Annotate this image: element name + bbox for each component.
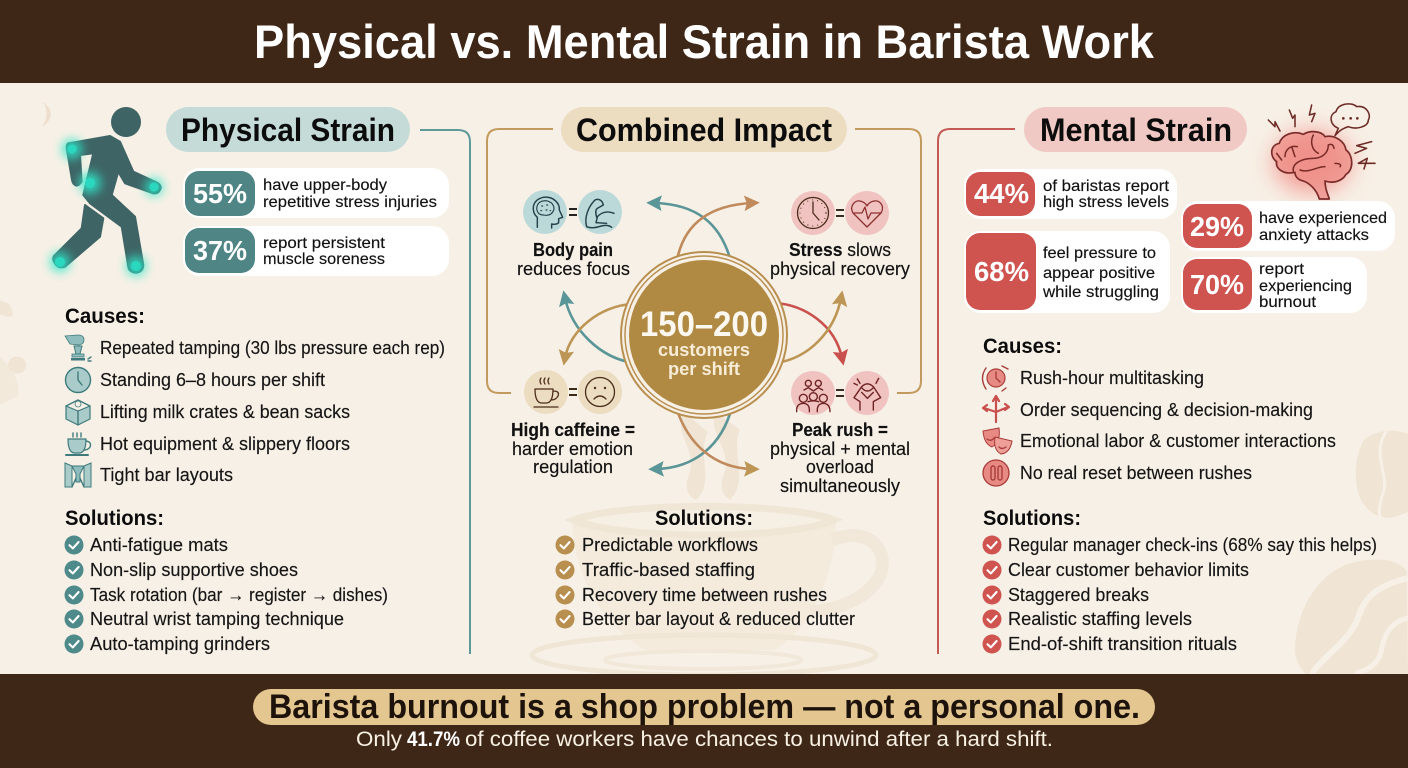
stat: 37%: [183, 226, 449, 276]
stat: 29%: 29%: [1190, 211, 1244, 242]
icon: theatre masks: [983, 428, 1012, 454]
solutions: physical: Solutions:: [65, 507, 164, 530]
icon: hot cup: [66, 433, 90, 455]
icon: clock: [791, 191, 835, 235]
solutions: mental: Realistic staffing levels: [1008, 608, 1192, 629]
solutions: mental: [982, 507, 1377, 654]
effect: peak rush: simultaneously: [780, 475, 901, 496]
solutions: mental: Staggered breaks: [1008, 584, 1149, 605]
icon: overwhelmed person: [845, 371, 889, 415]
solutions: combined: [556, 507, 855, 629]
stat: 70%: experiencing: [1259, 278, 1352, 295]
effect: peak rush: Peak rush =: [792, 419, 888, 440]
footer headline: Barista burnout is a shop problem — not a personal one.: [269, 688, 1140, 726]
header band: [0, 0, 1408, 83]
stat: 70%: 70%: [1190, 269, 1244, 300]
icon: sad face: [578, 370, 622, 414]
solutions: mental: End-of-shift transition rituals: [1008, 633, 1237, 654]
stat: 68%: appear positive: [1043, 265, 1155, 282]
stat: 37%: muscle soreness: [263, 251, 385, 268]
effect: body pain reduces focus: [517, 190, 630, 279]
solutions: physical: Neutral wrist tamping technique: [90, 608, 344, 629]
stat: 29%: anxiety attacks: [1259, 227, 1369, 244]
icon: rush clock: [982, 366, 1008, 391]
solutions: mental: Solutions:: [983, 507, 1081, 530]
effect: body pain reduces focus: Body pain: [533, 239, 613, 260]
icon: crate: [66, 400, 90, 425]
background watermark: coffee cup and beans: [0, 102, 1408, 675]
solutions: mental: Clear customer behavior limits: [1008, 559, 1249, 580]
stat: 70%: burnout: [1259, 294, 1317, 311]
icon: tamper: [65, 335, 91, 361]
causes: physical: Tight bar layouts: [100, 464, 233, 485]
heading: mental strain: Mental Strain: [1040, 112, 1232, 148]
footer subtext: Only: [356, 728, 403, 751]
solutions: combined: Solutions:: [655, 507, 753, 530]
effect: high caffeine: regulation: [533, 456, 613, 477]
effect: high caffeine: High caffeine =: [511, 419, 635, 440]
icon: brain head: [523, 190, 567, 234]
causes: mental: Causes:: [983, 335, 1062, 358]
stat: 68%: while struggling: [1042, 284, 1159, 301]
effect: high caffeine: [511, 370, 635, 477]
solutions: combined: Traffic-based staffing: [582, 559, 755, 580]
solutions: mental: Regular manager check-ins (68% say this helps): [1008, 534, 1377, 555]
stat: 55%: 55%: [193, 178, 247, 209]
stat: 55%: repetitive stress injuries: [263, 194, 437, 211]
footer subtext: of coffee workers have chances to unwind after a hard shift.: [465, 728, 1053, 751]
panel: combined impact: [487, 107, 921, 629]
stat: 44%: of baristas report: [1043, 178, 1170, 195]
footer subtext: 41.7%: [407, 728, 460, 751]
effect: stress slows physical recovery: [770, 191, 911, 279]
connector line: physical: [420, 130, 470, 654]
footer band: [0, 674, 1408, 768]
icon: flexed arm: [578, 190, 622, 234]
causes: physical: Hot equipment & slippery floors: [100, 433, 350, 454]
causes: physical: Repeated tamping (30 lbs pressure each rep): [100, 337, 445, 358]
title: Physical vs. Mental Strain in Barista Work: [254, 15, 1155, 68]
effect: stress slows physical recovery: physical recovery: [770, 258, 911, 279]
icon: branching signpost: [983, 396, 1009, 422]
icon: tight bar: [65, 463, 91, 487]
icon: pause: [983, 460, 1009, 486]
stat: 68%: 68%: [974, 256, 1029, 287]
panel: physical strain: [50, 107, 470, 654]
causes: mental: Rush-hour multitasking: [1020, 367, 1204, 388]
connector bracket: combined: [487, 129, 921, 393]
centre stat: customers per shift: [621, 252, 787, 418]
stat: 68%: feel pressure to: [1043, 245, 1156, 262]
connector line: mental: [938, 129, 1015, 654]
panel: mental strain: [938, 104, 1395, 654]
causes: physical: Lifting milk crates & bean sacks: [100, 401, 350, 422]
centre stat: customers per shift: 150–200: [640, 305, 768, 344]
icon: stressed brain: [1268, 104, 1375, 199]
effect: peak rush: [770, 371, 910, 496]
stat: 29%: [1181, 201, 1395, 251]
stat: 37%: 37%: [193, 235, 247, 266]
stat: 70%: report: [1259, 261, 1305, 278]
stat: 37%: report persistent: [263, 235, 386, 252]
effect: body pain reduces focus: reduces focus: [517, 258, 630, 279]
causes: mental: Order sequencing & decision-making: [1020, 399, 1313, 420]
effect: peak rush: overload: [806, 456, 874, 477]
stat: 70%: [1181, 257, 1367, 313]
solutions: physical: Task rotation (bar → register → dishes): [90, 584, 388, 605]
stat: 55%: have upper-body: [263, 177, 387, 194]
solutions: physical: Auto-tamping grinders: [90, 633, 270, 654]
effect: peak rush: physical + mental: [770, 438, 910, 459]
stat: 68%: [964, 231, 1170, 313]
solutions: physical: [64, 507, 388, 654]
icon: clock: [66, 368, 90, 392]
causes: mental: No real reset between rushes: [1020, 462, 1252, 483]
icon: heartbeat: [845, 191, 889, 235]
arrows around the centre: [565, 203, 842, 469]
solutions: combined: Recovery time between rushes: [582, 584, 827, 605]
stat: 44%: [964, 169, 1177, 219]
solutions: physical: Non-slip supportive shoes: [90, 559, 298, 580]
icon: coffee cup: [524, 370, 568, 414]
icon: crowd: [791, 371, 835, 415]
solutions: physical: Anti-fatigue mats: [90, 534, 228, 555]
heading: combined impact: Combined Impact: [576, 112, 832, 148]
causes: physical: Causes:: [65, 305, 145, 328]
centre stat: customers per shift: per shift: [668, 359, 740, 379]
heading: physical strain: Physical Strain: [181, 112, 395, 148]
effect: stress slows physical recovery: Stress slows: [789, 239, 891, 260]
stat: 44%: 44%: [974, 178, 1029, 209]
causes: mental: Emotional labor & customer interactions: [1020, 430, 1336, 451]
causes: mental: [982, 335, 1336, 486]
stat: 55%: [183, 168, 449, 218]
effect: high caffeine: harder emotion: [512, 438, 633, 459]
stat: 29%: have experienced: [1259, 210, 1387, 227]
causes: physical: Standing 6–8 hours per shift: [100, 369, 325, 390]
solutions: combined: Better bar layout & reduced clutter: [582, 608, 855, 629]
causes: physical: [65, 305, 445, 487]
solutions: combined: Predictable workflows: [582, 534, 758, 555]
stat: 44%: high stress levels: [1043, 194, 1169, 211]
centre stat: customers per shift: customers: [658, 340, 750, 360]
icon: running figure with glowing pain points: [50, 107, 163, 276]
